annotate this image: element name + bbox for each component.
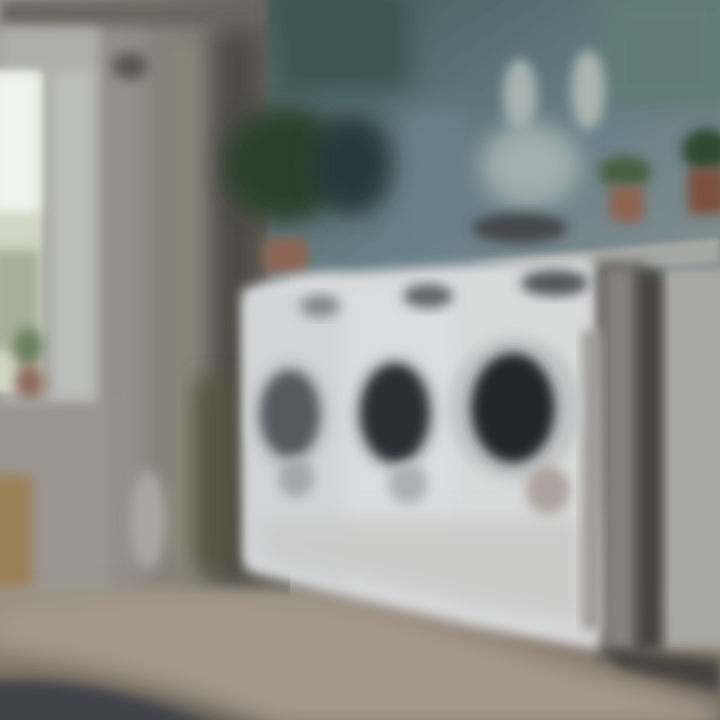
white bottles on shelf bbox=[472, 50, 605, 243]
wall lamp bbox=[112, 52, 148, 80]
drum: middle bbox=[349, 354, 441, 474]
floor shadow under machines bbox=[600, 648, 720, 692]
washing machines bbox=[242, 258, 602, 650]
drum: left bbox=[250, 359, 330, 471]
window glass bbox=[0, 72, 42, 392]
potted plant: large bbox=[225, 107, 392, 274]
machine bodies bbox=[242, 258, 600, 650]
control panels bbox=[300, 295, 340, 317]
background wall: left bbox=[0, 0, 290, 620]
counter and cabinet right bbox=[470, 238, 720, 662]
potted plants: right bbox=[599, 128, 720, 222]
drum: right bbox=[449, 336, 581, 480]
lower left wall and wicker basket bbox=[0, 380, 231, 595]
window frame bbox=[0, 28, 100, 408]
background wall: teal bbox=[268, 0, 720, 280]
floor rug bbox=[0, 592, 720, 720]
